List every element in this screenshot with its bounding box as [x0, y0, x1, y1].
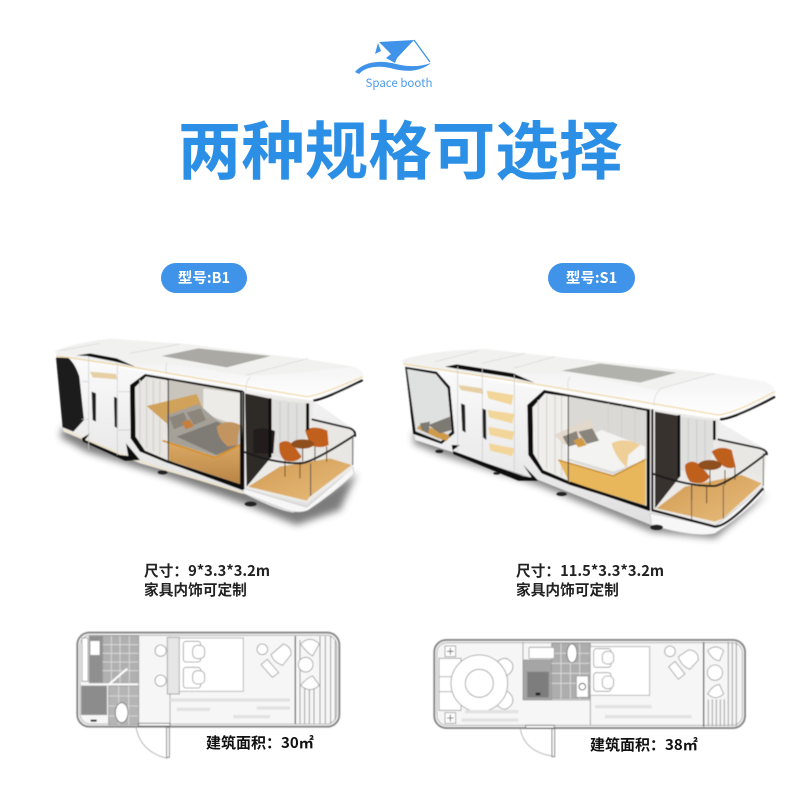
- floor plan: B1: [77, 633, 339, 758]
- floor plan: S1: [434, 640, 745, 757]
- label pill: B1: 型号:B1: [178, 267, 230, 288]
- label pill: S1: [548, 263, 635, 293]
- label pill: B1: [161, 263, 247, 293]
- spec text: B1: [144, 560, 270, 600]
- spec text: S1: 家具内饰可定制: [516, 579, 619, 600]
- spec text: B1: 尺寸：9*3.3*3.2m: [144, 560, 270, 581]
- label pill: S1: 型号:S1: [566, 267, 617, 288]
- area label: B1: 建筑面积：30㎡: [206, 732, 314, 753]
- cabin illustration: B1: [55, 339, 363, 525]
- area label: S1: 建筑面积：38㎡: [590, 734, 698, 755]
- spec text: S1: [516, 560, 664, 600]
- title: 两种规格可选择: [178, 101, 622, 193]
- cabin illustration: S1: [402, 349, 775, 538]
- spec text: S1: 尺寸：11.5*3.3*3.2m: [516, 560, 664, 581]
- logo: Space booth: [355, 40, 432, 91]
- logo: Space booth: Space booth: [366, 75, 432, 91]
- spec text: B1: 家具内饰可定制: [144, 579, 247, 600]
